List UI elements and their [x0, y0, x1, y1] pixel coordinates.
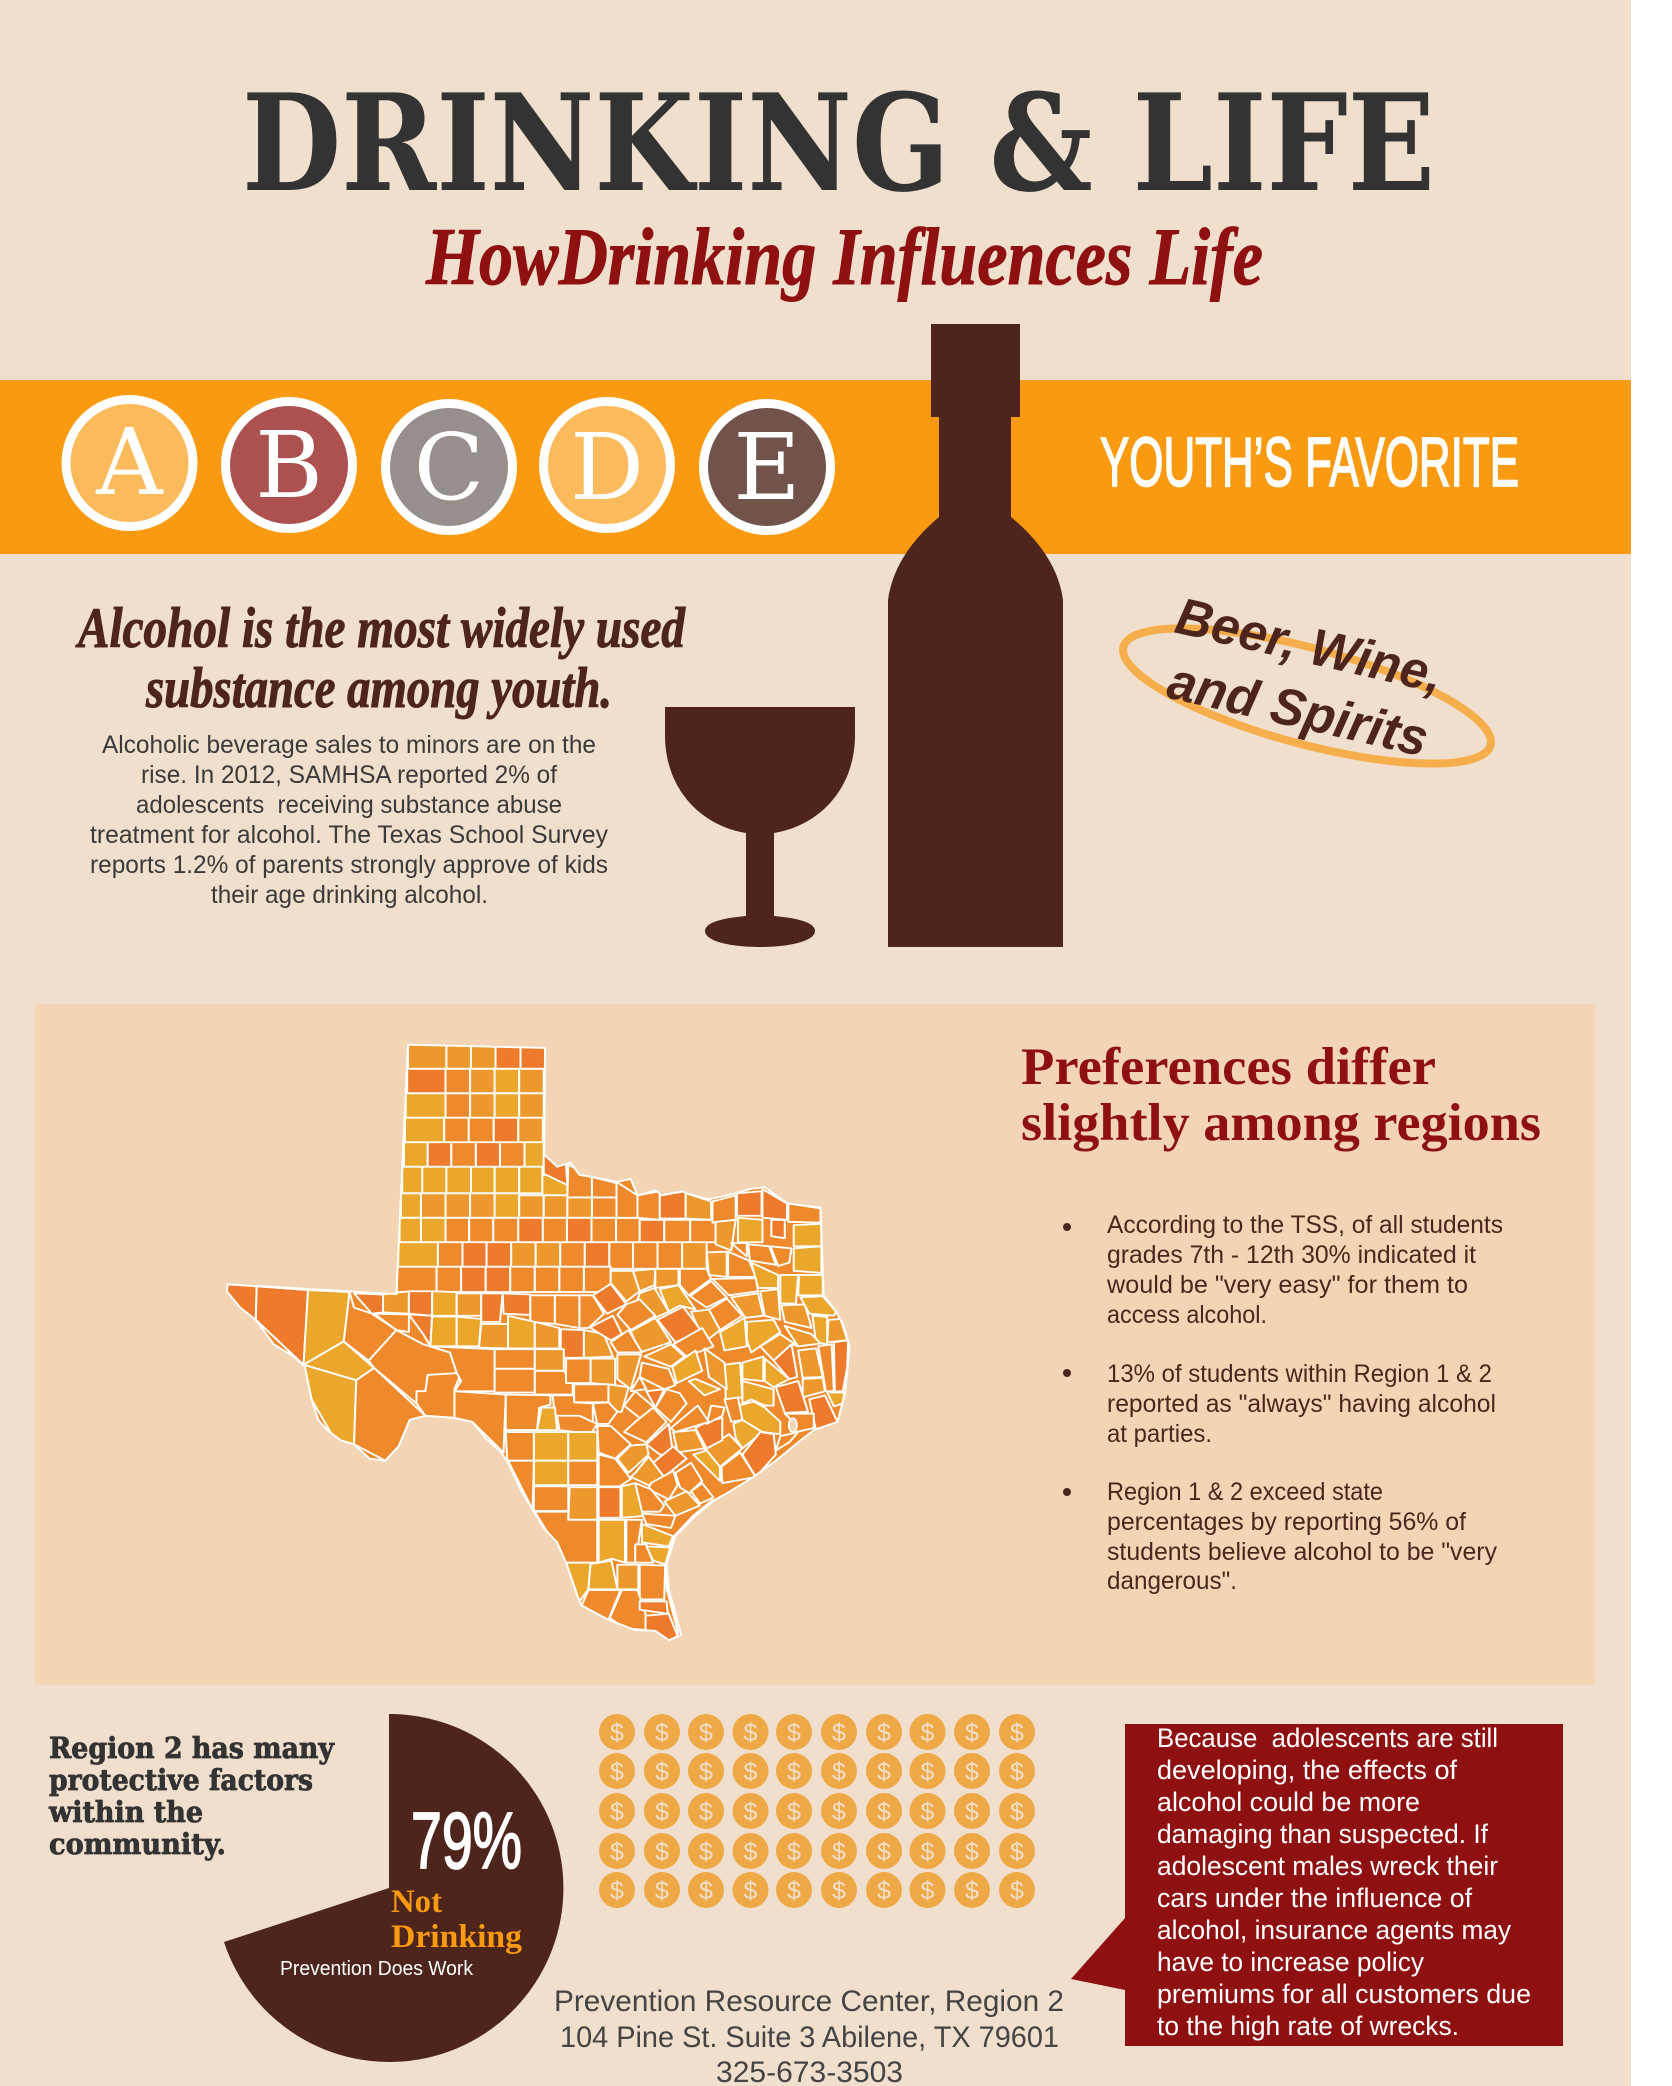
callout text: damaging than suspected. If — [1157, 1819, 1488, 1849]
alcohol body text: treatment for alcohol. The Texas School Survey — [90, 821, 608, 849]
circle C — [386, 404, 512, 530]
pie chart: 79% not drinking — [224, 1714, 563, 2062]
bullet list — [1063, 1211, 1503, 1595]
callout text: developing, the effects of — [1157, 1755, 1457, 1785]
panel heading: Preferences differ — [1021, 1038, 1436, 1096]
callout text: to the high rate of wrecks. — [1157, 2011, 1459, 2041]
callout: speech box — [1071, 1723, 1563, 2046]
callout text: adolescent males wreck their — [1157, 1851, 1498, 1881]
coin grid: $$$$$$$$$$ — [610, 1719, 1024, 1747]
percentage: 79% — [411, 1796, 522, 1885]
circle A — [66, 400, 193, 526]
alcohol heading: substance among youth. — [145, 657, 612, 720]
circle D: D — [570, 414, 644, 521]
protective factors text: protective factors — [49, 1763, 313, 1797]
protective factors text: within the — [48, 1795, 203, 1829]
bullet one: According to the TSS, of all students — [1107, 1211, 1503, 1239]
callout text: Because adolescents are still — [1157, 1723, 1498, 1753]
speech bubble — [1071, 1724, 1563, 2046]
icon: wine glass — [665, 707, 855, 947]
alcohol heading — [76, 597, 686, 720]
coin grid — [599, 1714, 1035, 1908]
callout text: Beer, Wine, — [1170, 587, 1448, 705]
pie wedge — [224, 1714, 563, 2062]
icon: wine bottle — [888, 324, 1063, 947]
subtitle: HowDrinking Influences Life — [425, 211, 1263, 302]
alcohol body text — [90, 731, 608, 909]
bullet three — [1063, 1478, 1497, 1595]
callout text: premiums for all customers due — [1157, 1979, 1531, 2009]
alcohol body text: rise. In 2012, SAMHSA reported 2% of — [141, 761, 557, 789]
circle B: B — [255, 412, 323, 519]
protective factors text: community. — [49, 1827, 226, 1861]
bullet three: students believe alcohol to be "very — [1107, 1538, 1497, 1566]
coin grid: $$$$$$$$$$ — [610, 1838, 1024, 1866]
circle C: C — [414, 414, 484, 521]
panel: regions — [35, 1004, 1595, 1685]
coin grid: $$$$$$$$$$ — [610, 1798, 1024, 1826]
map: Texas counties — [227, 1045, 850, 1640]
protective factors text: Region 2 has many — [49, 1731, 335, 1765]
callout text — [1162, 587, 1448, 768]
orange ellipse — [1111, 600, 1503, 792]
panel background — [35, 1004, 1595, 1685]
not drinking label — [391, 1884, 523, 1955]
bullet two: 13% of students within Region 1 & 2 — [1107, 1360, 1492, 1388]
alcohol body text: reports 1.2% of parents strongly approve of kids — [90, 851, 608, 879]
callout text — [1157, 1723, 1531, 2041]
bullet two — [1063, 1360, 1496, 1448]
bullet two: at parties. — [1107, 1420, 1212, 1448]
contact address: 104 Pine St. Suite 3 Abilene, TX 79601 — [560, 2021, 1059, 2054]
coin grid: $$$$$$$$$$ — [610, 1758, 1024, 1786]
bullet one — [1063, 1211, 1503, 1329]
bullet one: grades 7th - 12th 30% indicated it — [1107, 1241, 1476, 1269]
bullet three: Region 1 & 2 exceed state — [1107, 1478, 1383, 1506]
alcohol body text: their age drinking alcohol. — [211, 881, 488, 909]
circle D — [544, 402, 670, 528]
orange banner — [0, 380, 1631, 554]
alcohol body text: Alcoholic beverage sales to minors are on the — [102, 731, 596, 759]
callout text: cars under the influence of — [1157, 1883, 1472, 1913]
bullet two: reported as "always" having alcohol — [1107, 1390, 1496, 1418]
circle E: E — [733, 414, 801, 521]
contact address: Prevention Resource Center, Region 2 — [554, 1985, 1064, 2018]
panel heading: slightly among regions — [1021, 1094, 1541, 1152]
callout text: and Spirits — [1162, 652, 1434, 768]
callout text: alcohol, insurance agents may — [1157, 1915, 1511, 1945]
bullet one: would be "very easy" for them to — [1106, 1271, 1468, 1299]
alcohol heading: Alcohol is the most widely used — [76, 597, 686, 660]
bullet three: dangerous". — [1107, 1567, 1237, 1595]
not drinking label: Drinking — [391, 1919, 523, 1955]
circle B — [226, 402, 352, 528]
prevention does work: Prevention Does Work — [280, 1958, 474, 1980]
circle E — [704, 404, 830, 530]
alcohol body text: adolescents receiving substance abuse — [136, 791, 562, 819]
beer, wine and spirits callout — [1111, 587, 1503, 792]
coin grid: $$$$$$$$$$ — [610, 1877, 1024, 1905]
callout text: have to increase policy — [1157, 1947, 1424, 1977]
bullet one: access alcohol. — [1107, 1301, 1267, 1329]
grade circles — [66, 400, 830, 530]
bullet three: percentages by reporting 56% of — [1107, 1508, 1466, 1536]
circle A: A — [95, 409, 164, 516]
panel heading — [1021, 1038, 1541, 1152]
not drinking label: Not — [391, 1884, 442, 1920]
protective factors text — [48, 1731, 335, 1861]
contact address — [554, 1985, 1064, 2086]
callout text: alcohol could be more — [1157, 1787, 1420, 1817]
title: DRINKING & LIFE — [242, 64, 1435, 222]
